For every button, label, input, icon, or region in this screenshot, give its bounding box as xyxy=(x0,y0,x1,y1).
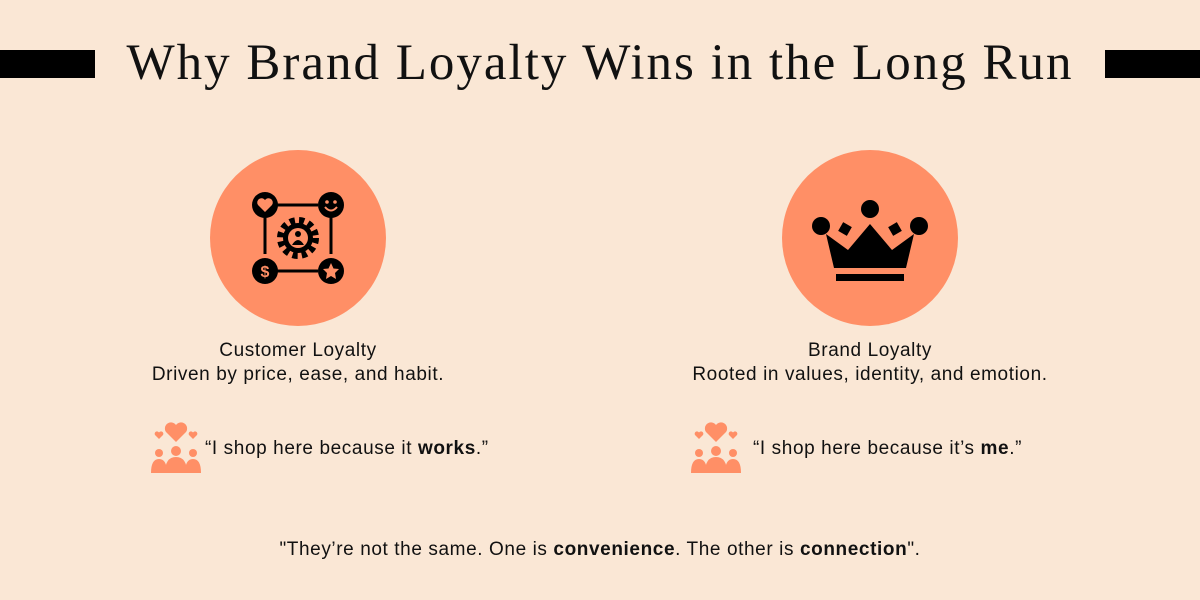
closing statement: "They’re not the same. One is convenience. The other is connection". xyxy=(279,539,921,560)
text block: customer loyalty: Customer Loyalty xyxy=(219,340,377,361)
decorative bar right xyxy=(1105,50,1200,78)
title: Why Brand Loyalty Wins in the Long Run xyxy=(126,35,1073,91)
quote right xyxy=(691,422,1022,473)
decorative bar left xyxy=(0,50,95,78)
icon: people hearts xyxy=(151,422,201,473)
quote text: “I shop here because it’s me.” xyxy=(753,438,1022,459)
text block: customer loyalty xyxy=(152,340,444,385)
quote text: “I shop here because it works.” xyxy=(205,438,489,459)
text block: brand loyalty xyxy=(692,340,1048,385)
icon: people hearts xyxy=(691,422,741,473)
icon: customer loyalty network: $ xyxy=(261,264,270,281)
text block: brand loyalty: Brand Loyalty xyxy=(808,340,932,361)
icon: customer loyalty network xyxy=(210,150,386,326)
text block: brand loyalty: Rooted in values, identity, and emotion. xyxy=(692,364,1048,385)
text block: customer loyalty: Driven by price, ease, and habit. xyxy=(152,364,444,385)
quote left xyxy=(151,422,489,473)
icon: crown xyxy=(782,150,958,326)
